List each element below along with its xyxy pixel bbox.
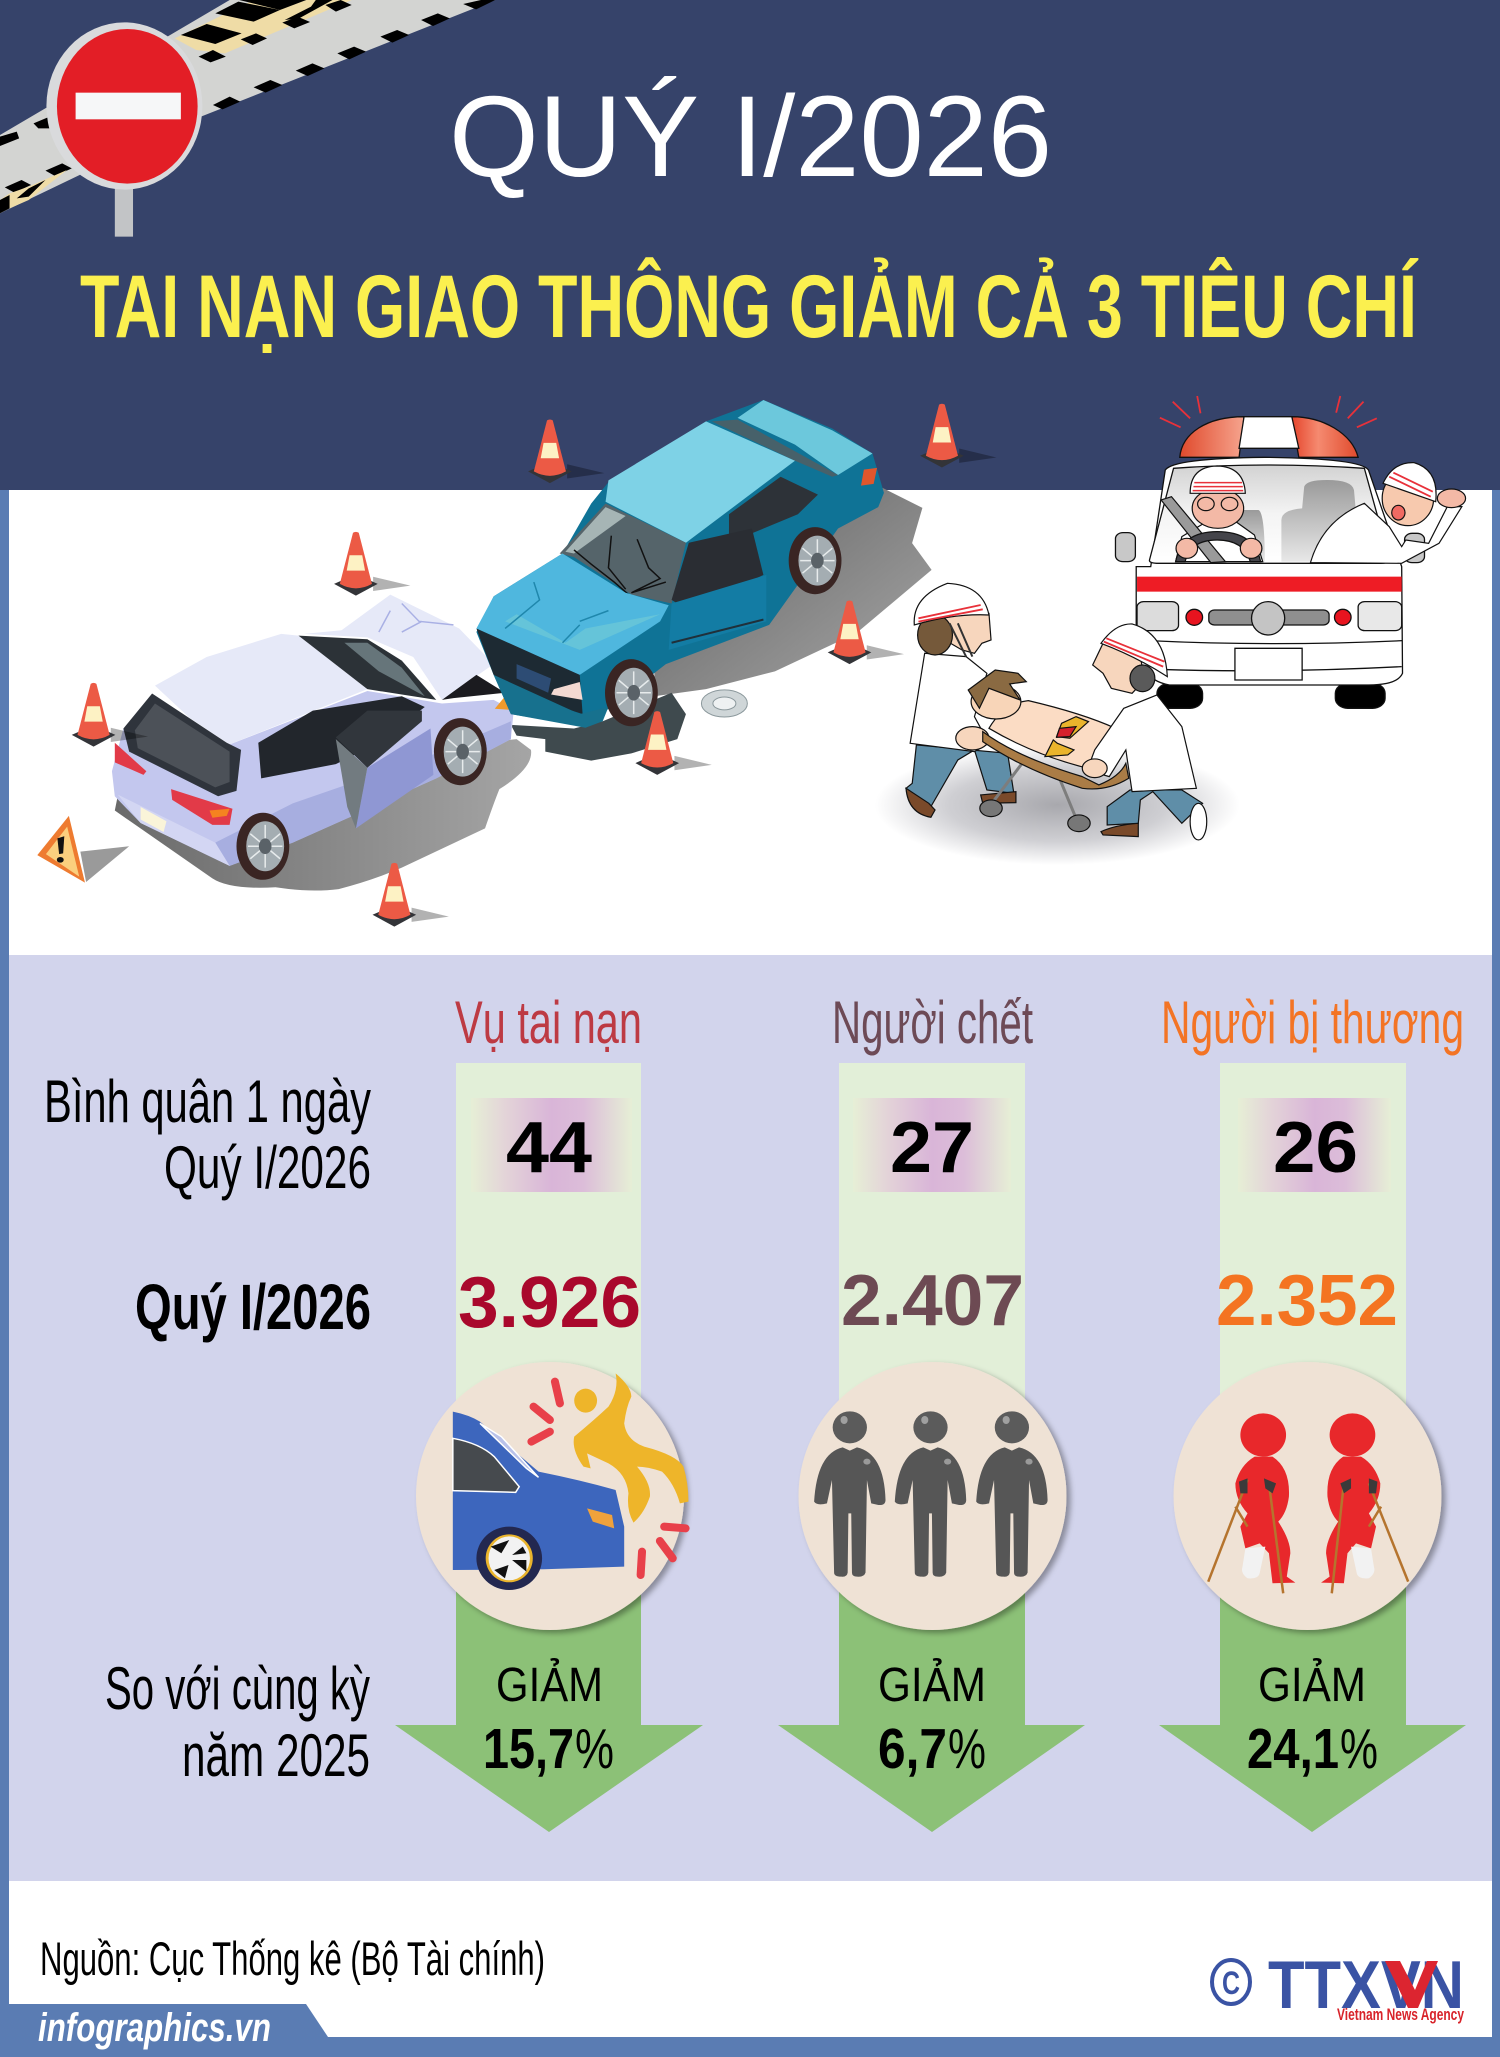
row label: quarter total: Quý I/2026 (135, 1271, 371, 1343)
arrow down (395, 1496, 703, 1832)
change value: accidents: % (575, 1717, 614, 1781)
column 1: accidents (395, 989, 703, 1832)
icon: traffic cones (72, 404, 996, 927)
icon: paramedic right (1082, 624, 1207, 840)
row label: daily average (44, 1068, 371, 1201)
ground shadow (875, 745, 1240, 865)
panel: statistics background (9, 955, 1492, 1881)
row label: comparison: So với cùng kỳ (105, 1655, 370, 1722)
change value: accidents: GIẢM (496, 1657, 603, 1712)
column heading: Người chết (832, 989, 1033, 1056)
icon: stretcher with patient (968, 670, 1129, 832)
quarter value: 2.352 (1216, 1261, 1398, 1341)
column 3: injured (1159, 989, 1466, 1832)
change value: injured: GIẢM (1258, 1657, 1366, 1712)
icon: wheel hub cap (701, 690, 747, 717)
shadow of silver car (115, 739, 531, 891)
logo: TTXVN: TTXVN (1268, 1947, 1464, 2023)
daily value box (853, 1098, 1011, 1192)
icon: barrier road with no-entry sign (0, 0, 495, 237)
row label: comparison: năm 2025 (182, 1722, 370, 1789)
row label: comparison (105, 1655, 370, 1789)
title: QUÝ I/2026 (449, 73, 1052, 201)
header background (0, 0, 1500, 490)
daily value: 26 (1273, 1108, 1358, 1188)
change value: accidents: 15,7 (483, 1717, 574, 1781)
panel: footer background (9, 1881, 1492, 2037)
icon: no-entry sign (46, 22, 202, 190)
icon: driver (1161, 466, 1263, 563)
change value: injured: % (1340, 1717, 1378, 1781)
change value: injured (1247, 1657, 1378, 1781)
change value: deaths: % (948, 1717, 986, 1781)
column 2: deaths (778, 989, 1085, 1832)
quarter value: 3.926 (458, 1263, 641, 1343)
icon: warning triangle (37, 816, 129, 883)
daily value: 27 (890, 1108, 974, 1188)
illustration: ambulance and paramedics (875, 396, 1466, 865)
daily value: 44 (506, 1108, 592, 1188)
arrow band (839, 1063, 1025, 1496)
change value: deaths (878, 1657, 986, 1781)
side borders and bottom bar (0, 490, 1500, 2057)
change value: deaths: 6,7 (878, 1717, 947, 1781)
logo: TTXVN (1212, 1947, 1464, 2024)
quarter value: 2.407 (841, 1261, 1024, 1341)
arrow band (1220, 1063, 1406, 1496)
icon circle backgrounds (416, 1362, 1442, 1630)
illustration: car crash scene (37, 400, 996, 927)
change value: injured: 24,1 (1247, 1717, 1339, 1781)
icon: two red people on crutches (1208, 1413, 1408, 1593)
row label: daily average: Bình quân 1 ngày (44, 1068, 371, 1135)
arrow down (1159, 1496, 1466, 1832)
shadow of blue car (654, 486, 932, 696)
icon: car hitting pedestrian (453, 1373, 688, 1590)
arrow band (456, 1063, 641, 1496)
logo: TTXVN: C (1222, 1965, 1240, 2001)
icon: sign pole (115, 187, 133, 237)
daily value box (1238, 1098, 1391, 1192)
arrow down (778, 1496, 1085, 1832)
website tab: infographics.vn (38, 2006, 271, 2050)
icon: ambulance (1115, 396, 1424, 708)
row label: daily average: Quý I/2026 (164, 1134, 371, 1201)
column heading: Vụ tai nạn (455, 989, 642, 1056)
icon: paramedic left (906, 583, 1016, 817)
change value: accidents (483, 1657, 614, 1781)
icon: three grey people (814, 1411, 1048, 1577)
panel: illustration background (9, 490, 1492, 955)
source note: Nguồn: Cục Thống kê (Bộ Tài chính) (40, 1932, 545, 1985)
daily value box (471, 1098, 632, 1192)
change value: deaths: GIẢM (878, 1657, 986, 1712)
icon: silver car (112, 595, 514, 880)
icon: passenger waving (1310, 463, 1466, 563)
icon: blue car (476, 400, 884, 728)
oil puddle (511, 693, 686, 761)
